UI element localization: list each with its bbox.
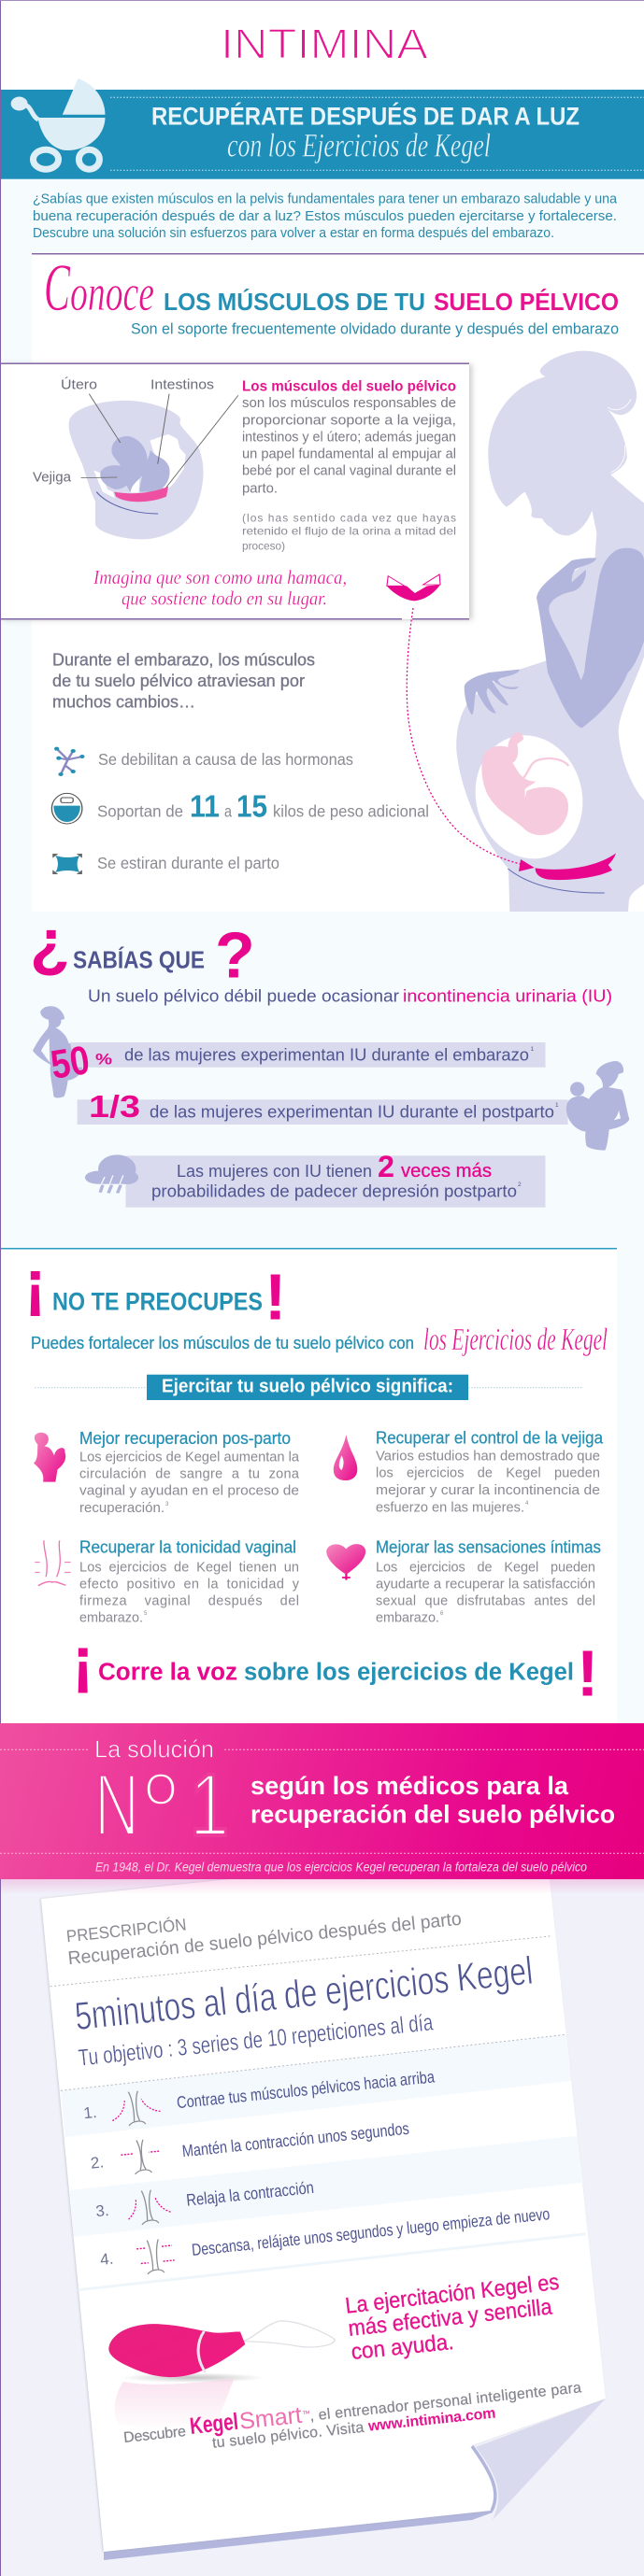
step 4: 4. xyxy=(99,2250,114,2269)
benefit: vejiga: esfuerzo en las mujeres. xyxy=(376,1500,524,1515)
icon: hammock xyxy=(387,574,440,601)
silhouette: mother and baby xyxy=(566,1061,629,1151)
benefit: recuperación xyxy=(79,1429,300,1516)
icon: stroller xyxy=(11,78,106,169)
number one: O xyxy=(145,1765,177,1814)
callout: con ayuda: con ayuda. xyxy=(350,2329,455,2365)
heading: conoce xyxy=(44,250,619,325)
heading: conoce: onoce xyxy=(70,264,154,321)
benefit: vejiga: Recuperar el control de la vejiga xyxy=(376,1428,604,1447)
panel: pelvic floor xyxy=(0,362,469,620)
icon: heart xyxy=(326,1544,365,1580)
banner xyxy=(0,78,644,179)
stat bar: 50%: 50 xyxy=(48,1038,93,1088)
benefit: sensaciones: Mejorar las sensaciones íntimas xyxy=(376,1538,601,1557)
panel body: intestinos y el útero; además juegan xyxy=(242,429,456,445)
statement: Un suelo pélvico débil puede ocasionar xyxy=(88,986,399,1005)
benefit: sensaciones: 6 xyxy=(440,1611,444,1617)
hand on belly xyxy=(465,670,520,715)
stat bar: 1/3 xyxy=(78,1089,568,1125)
prescription heading: PRESCRIPCIÓN xyxy=(65,1914,187,1946)
panel body: bebé por el canal vaginal durante el xyxy=(242,463,456,479)
stat bar: depression xyxy=(125,1150,546,1208)
promo text: www.intimina.com xyxy=(366,2405,496,2435)
pelvic muscle xyxy=(536,853,616,880)
pregnancy changes intro: muchos cambios… xyxy=(52,692,195,711)
callout: con ayuda: La ejercitación Kegel es xyxy=(344,2270,561,2319)
panel body: son los músculos responsables de xyxy=(242,395,456,411)
text: weight xyxy=(97,788,429,823)
heading: sabías que: ¿ xyxy=(30,906,70,979)
step 2: 2. xyxy=(90,2153,105,2173)
banner title: RECUPÉRATE DESPUÉS DE DAR A LUZ xyxy=(151,102,580,130)
la solución label: La solución xyxy=(94,1735,214,1763)
callout: con ayuda xyxy=(344,2270,561,2365)
promo text: , el entrenador personal inteligente para xyxy=(309,2380,582,2425)
benefit: sensaciones: ayudarte a recuperar la satisfacción xyxy=(376,1577,595,1592)
subheading: kegel: Puedes fortalecer los músculos de tu suelo pélvico con xyxy=(31,1334,414,1352)
stat bar: 50% xyxy=(48,1038,546,1088)
stat bar: depression: veces más xyxy=(401,1161,492,1182)
panel body: parto. xyxy=(242,480,278,496)
call to action: Corre la voz xyxy=(98,1659,237,1685)
promo text: Kegel xyxy=(189,2409,239,2440)
hammock quote: Imagina que son como una hamaca, xyxy=(93,566,347,588)
stat bar: 1/3: 1/3 xyxy=(89,1089,140,1124)
heading: conoce: LOS MÚSCULOS DE TU xyxy=(164,288,425,316)
box: ejercitar: Ejercitar tu suelo pélvico significa: xyxy=(162,1377,453,1397)
benefit: tonicidad: Recuperar la tonicidad vaginal xyxy=(79,1538,296,1557)
benefit: sensaciones: embarazo. xyxy=(376,1611,439,1626)
stat bar: 50%: 1 xyxy=(531,1046,535,1053)
banner subtitle: con los Ejercicios de Kegel xyxy=(227,127,491,164)
label: intestinos: Intestinos xyxy=(150,378,214,393)
text: weight: Soportan de xyxy=(97,801,183,820)
pregnancy changes intro xyxy=(52,650,315,711)
dotted arrow xyxy=(407,608,535,871)
heading: no te preocupes: NO TE PREOCUPES xyxy=(52,1287,263,1315)
icon: rain cloud xyxy=(85,1154,138,1193)
benefit: tonicidad: efecto positivo en la tonicidad y xyxy=(79,1577,300,1592)
text: weight: a xyxy=(224,801,232,820)
panel body: proporcionar soporte a la vejiga, xyxy=(242,412,456,428)
pregnancy changes intro: de tu suelo pélvico atraviesan por xyxy=(52,672,305,690)
icon: drop xyxy=(334,1435,357,1480)
benefit: recuperación: Mejor recuperacion pos-parto xyxy=(79,1429,291,1448)
benefit: tonicidad xyxy=(79,1538,300,1626)
band: la solución xyxy=(0,1723,644,1879)
text: stretch: Se estiran durante el parto xyxy=(97,854,279,872)
label: vejiga: Vejiga xyxy=(33,470,72,485)
step 1: 1. xyxy=(82,2103,98,2122)
heading: conoce: C xyxy=(44,250,71,325)
statement xyxy=(88,986,612,1005)
step 3: Relaja la contracción xyxy=(185,2178,315,2210)
benefit: sensaciones: Los ejercicios de Kegel pueden xyxy=(376,1560,595,1575)
prescription paper xyxy=(41,1879,606,2560)
benefit: recuperación: Los ejercicios de Kegel aumentan la xyxy=(79,1450,300,1465)
exercise rows xyxy=(61,2034,586,2290)
footnote: En 1948, el Dr. Kegel demuestra que los ejercicios Kegel recuperan la fortaleza del suelo pélvico xyxy=(95,1860,587,1874)
heading: no te preocupes: ¡ xyxy=(24,1247,46,1320)
step 3 xyxy=(94,2178,315,2226)
pelvis diagram xyxy=(69,394,238,539)
icon: scale xyxy=(51,793,82,824)
panel note: (los has sentido cada vez que hayas xyxy=(242,511,456,524)
promo text xyxy=(122,2380,582,2452)
subheading: Son el soporte frecuentemente olvidado durante y después del embarazo xyxy=(131,319,619,337)
benefit: sensaciones: sexual que disfrutabas antes del xyxy=(376,1594,595,1609)
heading: sabías que: SABÍAS QUE xyxy=(73,947,205,974)
label: útero: Útero xyxy=(61,377,97,393)
stat bar: depression: Las mujeres con IU tienen xyxy=(177,1162,372,1181)
band: la solución: recuperación del suelo pélvico xyxy=(250,1801,615,1829)
icon: hormones xyxy=(54,747,85,776)
product: kegelsmart xyxy=(108,2321,335,2431)
heading: no te preocupes xyxy=(24,1247,286,1333)
panel heading: Los músculos del suelo pélvico xyxy=(242,378,456,394)
benefit: tonicidad: embarazo. xyxy=(79,1611,143,1626)
icon: stretch xyxy=(52,854,82,874)
benefit: recuperación: recuperación. xyxy=(79,1501,165,1516)
dark arms xyxy=(537,548,644,728)
hammock quote xyxy=(93,566,347,609)
heading: sabías que xyxy=(30,906,255,992)
promo text: TM xyxy=(303,2410,309,2416)
benefit: tonicidad: 5 xyxy=(144,1611,148,1617)
step 1 xyxy=(82,2067,436,2128)
icon: mother xyxy=(34,1433,65,1482)
prescription goal: Tu objetivo : 3 series de 10 repeticiones al día xyxy=(78,2009,435,2072)
heading: conoce: SUELO PÉLVICO xyxy=(434,289,619,316)
number one: N xyxy=(94,1756,139,1855)
heading: no te preocupes: ! xyxy=(265,1260,286,1333)
step 2: Mantén la contracción unos segundos xyxy=(181,2119,410,2160)
womb xyxy=(462,723,596,870)
fetus xyxy=(481,732,568,835)
intro text: buena recuperación después de dar a luz? Estos músculos pueden ejercitarse y fortalecerse. xyxy=(33,209,617,224)
panel body xyxy=(242,395,456,496)
benefit: recuperación: vaginal y ayudan en el proceso de xyxy=(79,1484,299,1499)
benefit: recuperación: circulación de sangre a tu zona xyxy=(79,1466,300,1481)
step 2 xyxy=(90,2119,410,2175)
panel note: proceso) xyxy=(242,539,285,552)
promo text: Smart xyxy=(238,2402,303,2435)
text: weight: kilos de peso adicional xyxy=(273,801,429,820)
number one: 1 xyxy=(190,1756,229,1855)
call to action xyxy=(72,1624,598,1710)
stat bar: 50%: % xyxy=(95,1052,112,1069)
step 4 xyxy=(99,2204,551,2275)
pregnancy changes intro: Durante el embarazo, los músculos xyxy=(52,650,315,669)
promo text: Descubre xyxy=(122,2424,187,2446)
intro text: Descubre una solución sin esfuerzos para volver a estar en forma después del embarazo. xyxy=(33,226,554,241)
text: weight: 15 xyxy=(236,788,267,823)
benefit: vejiga: los ejercicios de Kegel pueden xyxy=(376,1466,600,1481)
icon: legs xyxy=(35,1540,71,1586)
call to action: sobre los ejercicios de Kegel xyxy=(244,1659,574,1685)
panel note xyxy=(242,511,456,552)
silhouette: pregnant woman xyxy=(456,351,644,912)
stat bar: depression: 2 xyxy=(378,1150,394,1183)
stat bar: 50%: de las mujeres experimentan IU durante el embarazo xyxy=(124,1046,529,1065)
panel note: retenido el flujo de la orina a mitad del xyxy=(242,525,456,538)
solution text: según los médicos para la xyxy=(250,1772,569,1800)
benefit: vejiga: Varios estudios han demostrado que xyxy=(376,1450,600,1465)
benefit: recuperación: 3 xyxy=(165,1502,169,1507)
step 1: Contrae tus músculos pélvicos hacia arriba xyxy=(176,2067,436,2112)
step 3: 3. xyxy=(94,2201,110,2220)
benefit: tonicidad: firmeza vaginal después del xyxy=(79,1594,299,1609)
call to action: ¡ xyxy=(72,1624,93,1697)
intro text xyxy=(33,192,618,241)
prescription heading: Recuperación de suelo pélvico después del parto xyxy=(67,1909,463,1969)
text: weight: 11 xyxy=(190,788,220,823)
benefit: vejiga: 4 xyxy=(525,1501,529,1507)
step 4: Descansa, relájate unos segundos y luego empieza de nuevo xyxy=(191,2204,551,2259)
statement: incontinencia urinaria (IU) xyxy=(403,986,612,1005)
stat bar: depression: probabilidades de padecer depresión postparto xyxy=(151,1182,517,1201)
benefit: tonicidad: Los ejercicios de Kegel tienen un xyxy=(79,1560,299,1575)
stat bar: depression: 2 xyxy=(518,1182,522,1188)
intro text: ¿Sabías que existen músculos en la pelvis fundamentales para tener un embarazo saludable y una xyxy=(33,192,618,207)
callout: con ayuda: más efectiva y sencilla xyxy=(347,2294,553,2342)
call to action: ! xyxy=(577,1637,598,1710)
logo: INTIMINA xyxy=(221,20,428,67)
promo text: tu suelo pélvico. Visita xyxy=(211,2420,365,2452)
heading: sabías que: ? xyxy=(215,919,255,992)
stat bar: 1/3: 1 xyxy=(555,1102,559,1109)
number one xyxy=(94,1756,229,1855)
stat bar: 1/3: de las mujeres experimentan IU durante el postparto xyxy=(150,1103,554,1122)
silhouette: small pregnant woman xyxy=(33,1006,83,1097)
panel body: un papel fundamental al empujar al xyxy=(242,446,456,461)
benefit: vejiga: mejorar y curar la incontinencia de xyxy=(376,1483,600,1498)
benefit: vejiga xyxy=(376,1428,604,1515)
text: hormones: Se debilitan a causa de las hormonas xyxy=(98,750,353,769)
benefit: sensaciones xyxy=(376,1538,601,1626)
subheading: kegel xyxy=(31,1323,608,1357)
hammock quote: que sostiene todo en su lugar. xyxy=(122,587,327,609)
